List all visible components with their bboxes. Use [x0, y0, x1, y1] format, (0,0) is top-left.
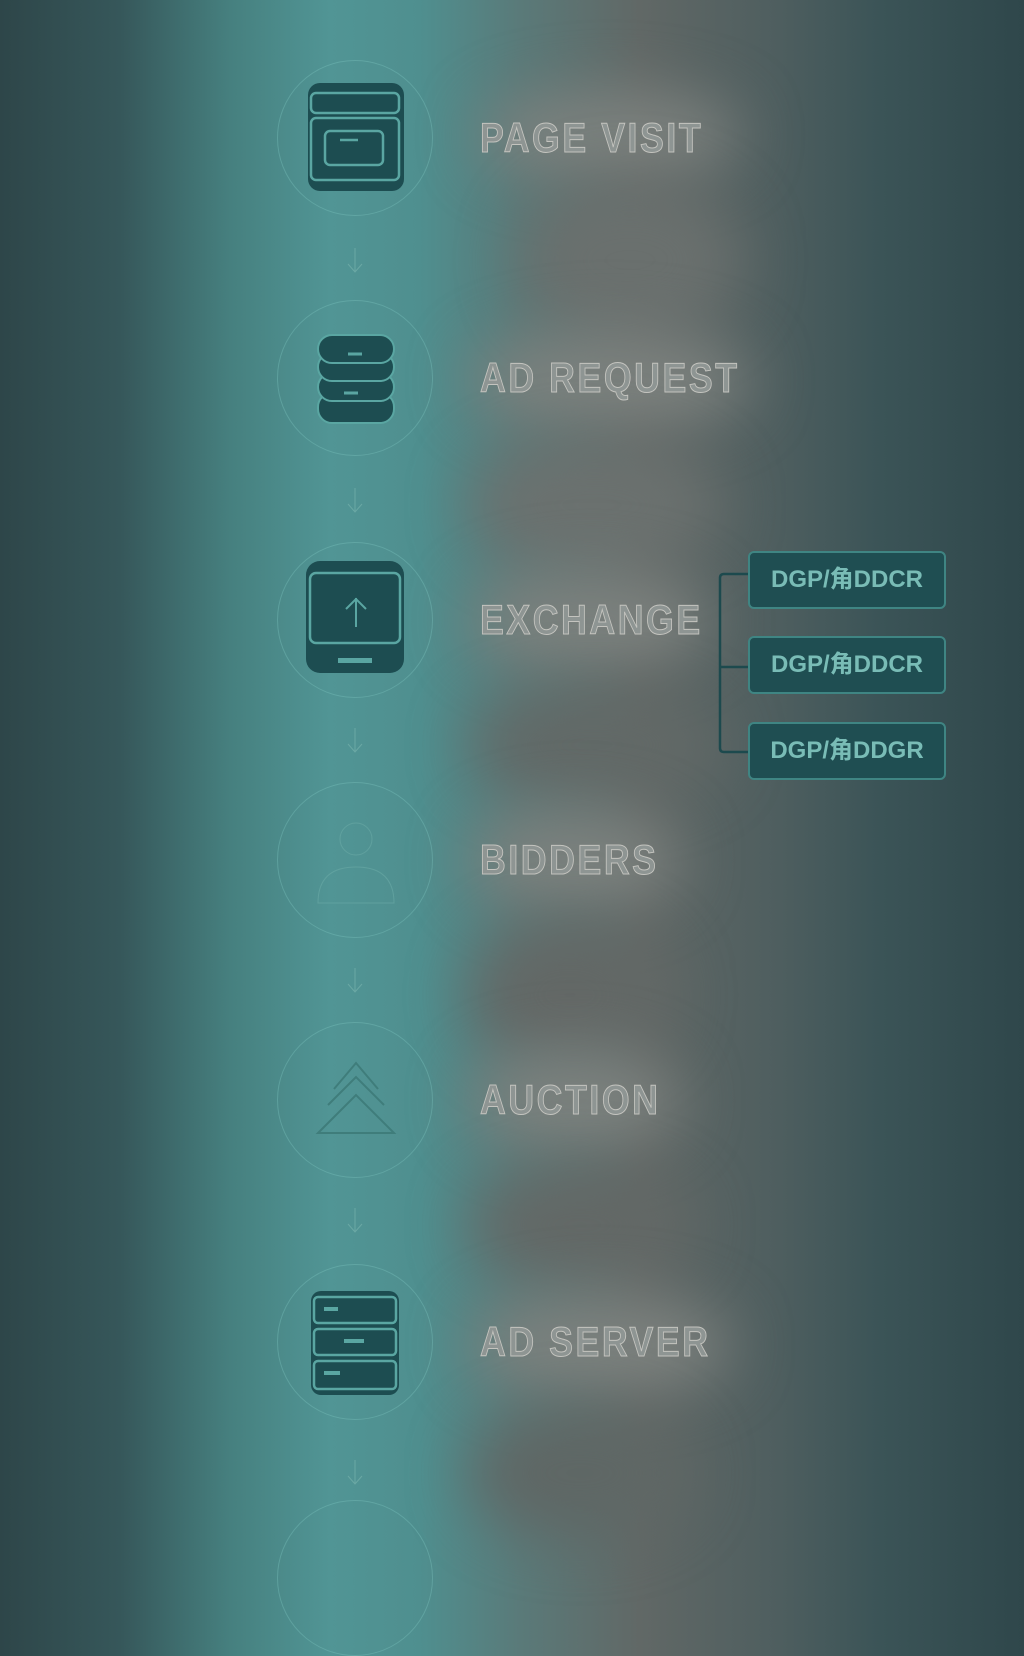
arrow [348, 968, 362, 992]
box 3 [748, 722, 946, 780]
step: exchange [277, 542, 703, 698]
icon: person [277, 782, 433, 938]
icon: browser window [277, 60, 433, 216]
label: AD SERVER [480, 1318, 711, 1365]
box 1: DGP/角DDCR [771, 566, 923, 593]
label: AUCTION [480, 1076, 660, 1123]
arrow [348, 1208, 362, 1232]
box 3: DGP/角DDGR [770, 737, 924, 764]
bidder branches [718, 551, 946, 780]
connector bracket [718, 572, 748, 754]
icon: server racks [277, 1264, 433, 1420]
arrow [348, 488, 362, 512]
step: ad request [277, 300, 740, 456]
arrow [348, 1460, 362, 1484]
partial next step circle [277, 1500, 433, 1656]
arrow [348, 248, 362, 272]
label: EXCHANGE [480, 596, 703, 643]
icon: gavel/triangles [277, 1022, 433, 1178]
step: auction [277, 1022, 660, 1178]
icon: database [277, 300, 433, 456]
label: BIDDERS [480, 836, 659, 883]
box 2: DGP/角DDCR [771, 651, 923, 678]
arrow [348, 728, 362, 752]
box 1 [748, 551, 946, 609]
label: PAGE VISIT [480, 114, 703, 161]
step: bidders [277, 782, 659, 938]
box 2 [748, 636, 946, 694]
icon: monitor with arrow [277, 542, 433, 698]
step: ad server [277, 1264, 711, 1420]
step: page visit [277, 60, 703, 216]
label: AD REQUEST [480, 354, 740, 401]
